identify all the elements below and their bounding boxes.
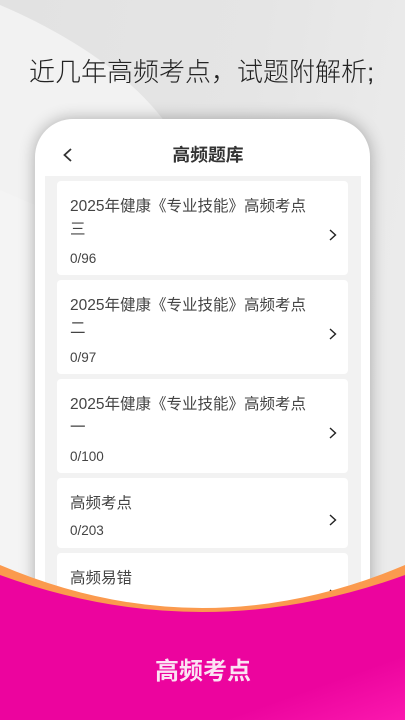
card 5 (57, 553, 348, 633)
icon: chevron (330, 590, 332, 591)
card 4 (57, 478, 348, 548)
card 2 title (70, 296, 306, 337)
panel: app screen (45, 129, 361, 639)
icon: chevron (330, 514, 336, 526)
card 1 title: 2025年健康《专业技能》高频考点 (70, 198, 306, 215)
card 2 title: 2025年健康《专业技能》高频考点 (70, 297, 306, 314)
card 1 count: 0/96 (70, 251, 96, 266)
icon: chevron (330, 230, 336, 240)
card 4 title: 高频考点 (70, 495, 132, 512)
card 2 count: 0/97 (70, 350, 96, 365)
card 2 (57, 280, 348, 374)
icon: chevron (330, 428, 336, 438)
card 3 title (70, 396, 306, 436)
card 1 (57, 181, 348, 275)
card 1 title (70, 198, 306, 238)
panel: phone mockup (35, 119, 370, 639)
card 1 title: 三 (70, 221, 86, 238)
card 5 title: 高频易错 (70, 570, 132, 587)
app header title: 高频题库 (172, 145, 244, 165)
app header (45, 129, 361, 176)
card 2 title: 二 (70, 320, 86, 337)
card 4 count: 0/203 (70, 523, 104, 538)
icon: back arrow (63, 148, 72, 162)
card 3 count: 0/100 (70, 449, 104, 464)
icon: chevron (330, 328, 336, 340)
list background (45, 176, 361, 639)
card 3 title: 2025年健康《专业技能》高频考点 (70, 396, 306, 413)
card 3 (57, 379, 348, 473)
banner label: 高频考点 (155, 658, 251, 685)
card 3 title: 一 (70, 419, 86, 436)
title: 近几年高频考点，试题附解析; (29, 57, 374, 87)
bottom banner (0, 565, 405, 720)
